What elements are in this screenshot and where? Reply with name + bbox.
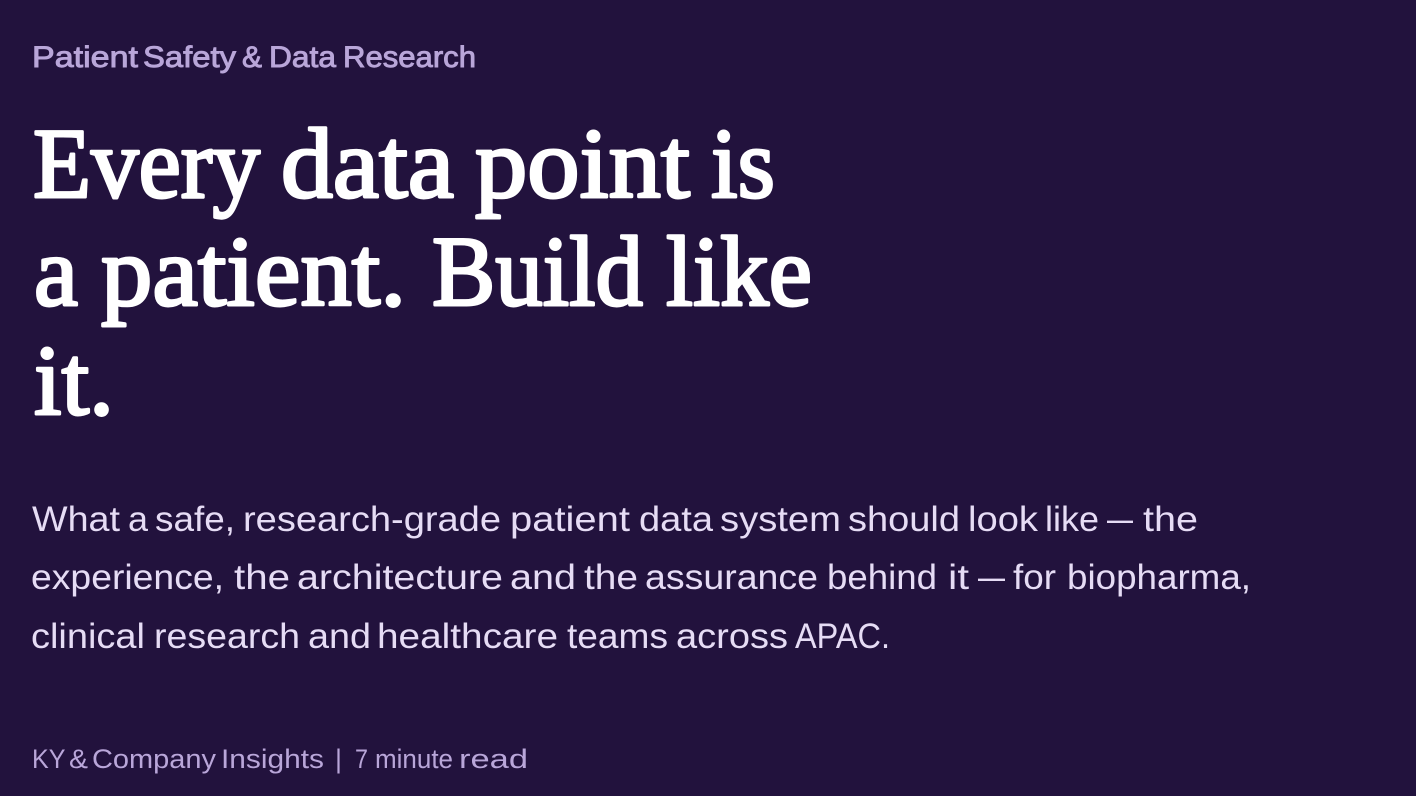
description text block: biopharma,	[1067, 558, 1251, 597]
description text block: What	[32, 500, 120, 539]
description text block: APAC.	[795, 617, 890, 656]
footer byline: |	[335, 744, 342, 774]
description text block: safe,	[155, 500, 235, 539]
footer byline: Company	[92, 744, 217, 774]
description text block: research	[154, 617, 300, 656]
description text block: teams	[567, 617, 668, 656]
description text block: experience,	[31, 558, 224, 597]
description text block: the	[234, 558, 290, 597]
description text block: —	[978, 558, 1005, 597]
title: point	[475, 108, 690, 219]
description text block: —	[1107, 500, 1133, 539]
description text block: research-grade	[243, 500, 501, 539]
description text block: system	[720, 500, 841, 539]
description text block: assurance	[645, 558, 818, 597]
description text block: a	[128, 500, 149, 539]
title: like	[666, 216, 812, 327]
footer byline: &	[69, 744, 88, 774]
description text block: should	[848, 500, 960, 539]
footer byline: KY	[32, 744, 65, 774]
description text block: and	[308, 617, 371, 656]
description text block: patient	[510, 500, 630, 539]
eyebrow heading: &	[242, 41, 262, 74]
title	[33, 108, 812, 436]
title: is	[711, 108, 775, 219]
footer byline: 7	[355, 744, 368, 774]
eyebrow heading: Safety	[143, 41, 236, 74]
description text block: the	[1143, 500, 1198, 539]
footer byline: Insights	[221, 744, 324, 774]
footer byline: minute	[375, 744, 453, 774]
eyebrow heading: Research	[343, 41, 476, 74]
description text block: for	[1013, 558, 1056, 597]
description text block: across	[676, 617, 788, 656]
description text block: it	[948, 558, 969, 597]
description text block: look	[968, 500, 1039, 539]
footer byline: read	[459, 744, 528, 774]
eyebrow heading: Patient	[32, 41, 139, 74]
eyebrow heading: Data	[269, 41, 336, 74]
title: a	[34, 216, 78, 327]
description text block: and	[510, 558, 576, 597]
title: patient.	[101, 216, 406, 327]
title: it.	[34, 325, 114, 436]
description text block: healthcare	[377, 617, 558, 656]
title: data	[281, 108, 454, 219]
description text block: data	[639, 500, 714, 539]
title: Build	[432, 216, 643, 327]
description text block: architecture	[297, 558, 503, 597]
description text block: the	[584, 558, 638, 597]
description text block: clinical	[31, 617, 145, 656]
title: Every	[33, 108, 260, 219]
description text block	[31, 500, 1251, 656]
description text block: behind	[827, 558, 937, 597]
description text block: like	[1045, 500, 1099, 539]
